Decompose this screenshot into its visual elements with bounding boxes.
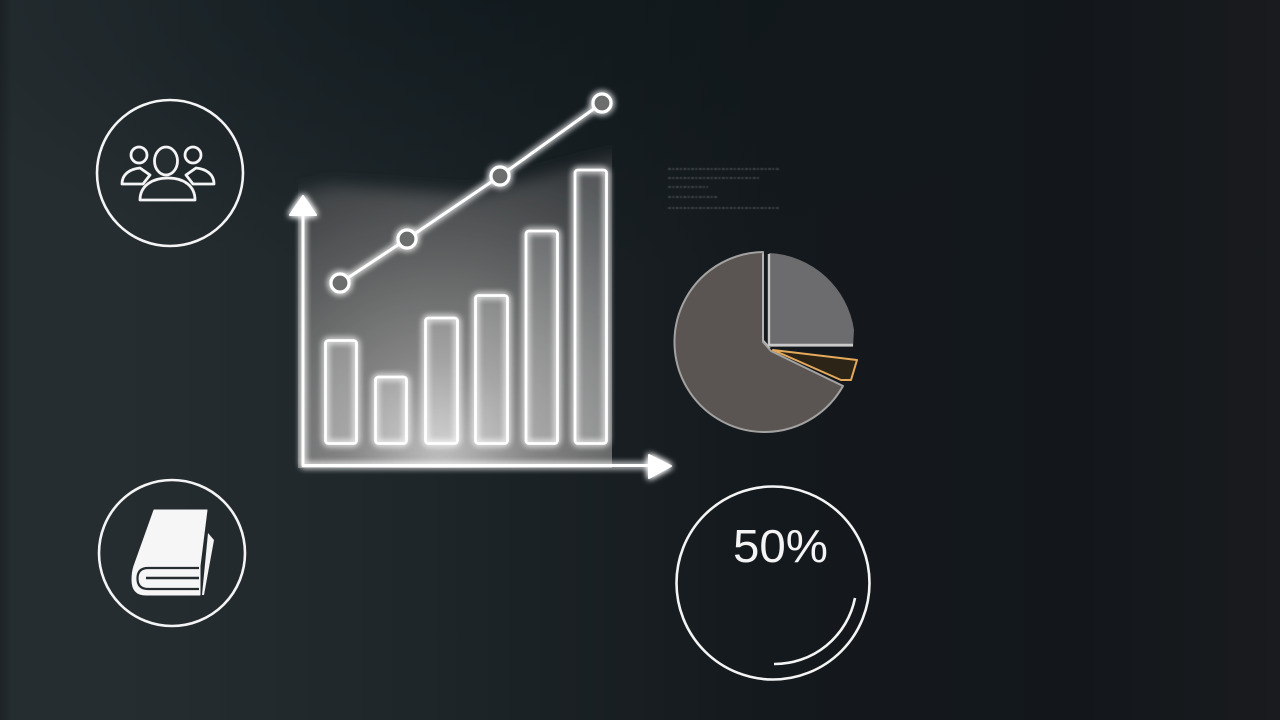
- pie chart: [674, 252, 857, 432]
- chart: bars, trend line and axes: [290, 94, 671, 500]
- trend line: [331, 94, 611, 292]
- small illegible note lines: [668, 169, 780, 208]
- bar fills: [326, 170, 606, 444]
- axes: [290, 196, 671, 478]
- progress ring: 50%: 50%: [733, 520, 828, 572]
- icon: people in circle: [97, 100, 243, 246]
- progress ring: 50%: [676, 486, 870, 680]
- chart background glow area: [298, 152, 612, 468]
- trend points: [331, 94, 611, 292]
- bar outlines: [326, 170, 606, 444]
- icon: book in circle: [99, 480, 245, 626]
- pie: quarter slice: [769, 253, 854, 347]
- pie: highlighted orange slice: [773, 350, 857, 380]
- pie: large slice: [674, 252, 843, 432]
